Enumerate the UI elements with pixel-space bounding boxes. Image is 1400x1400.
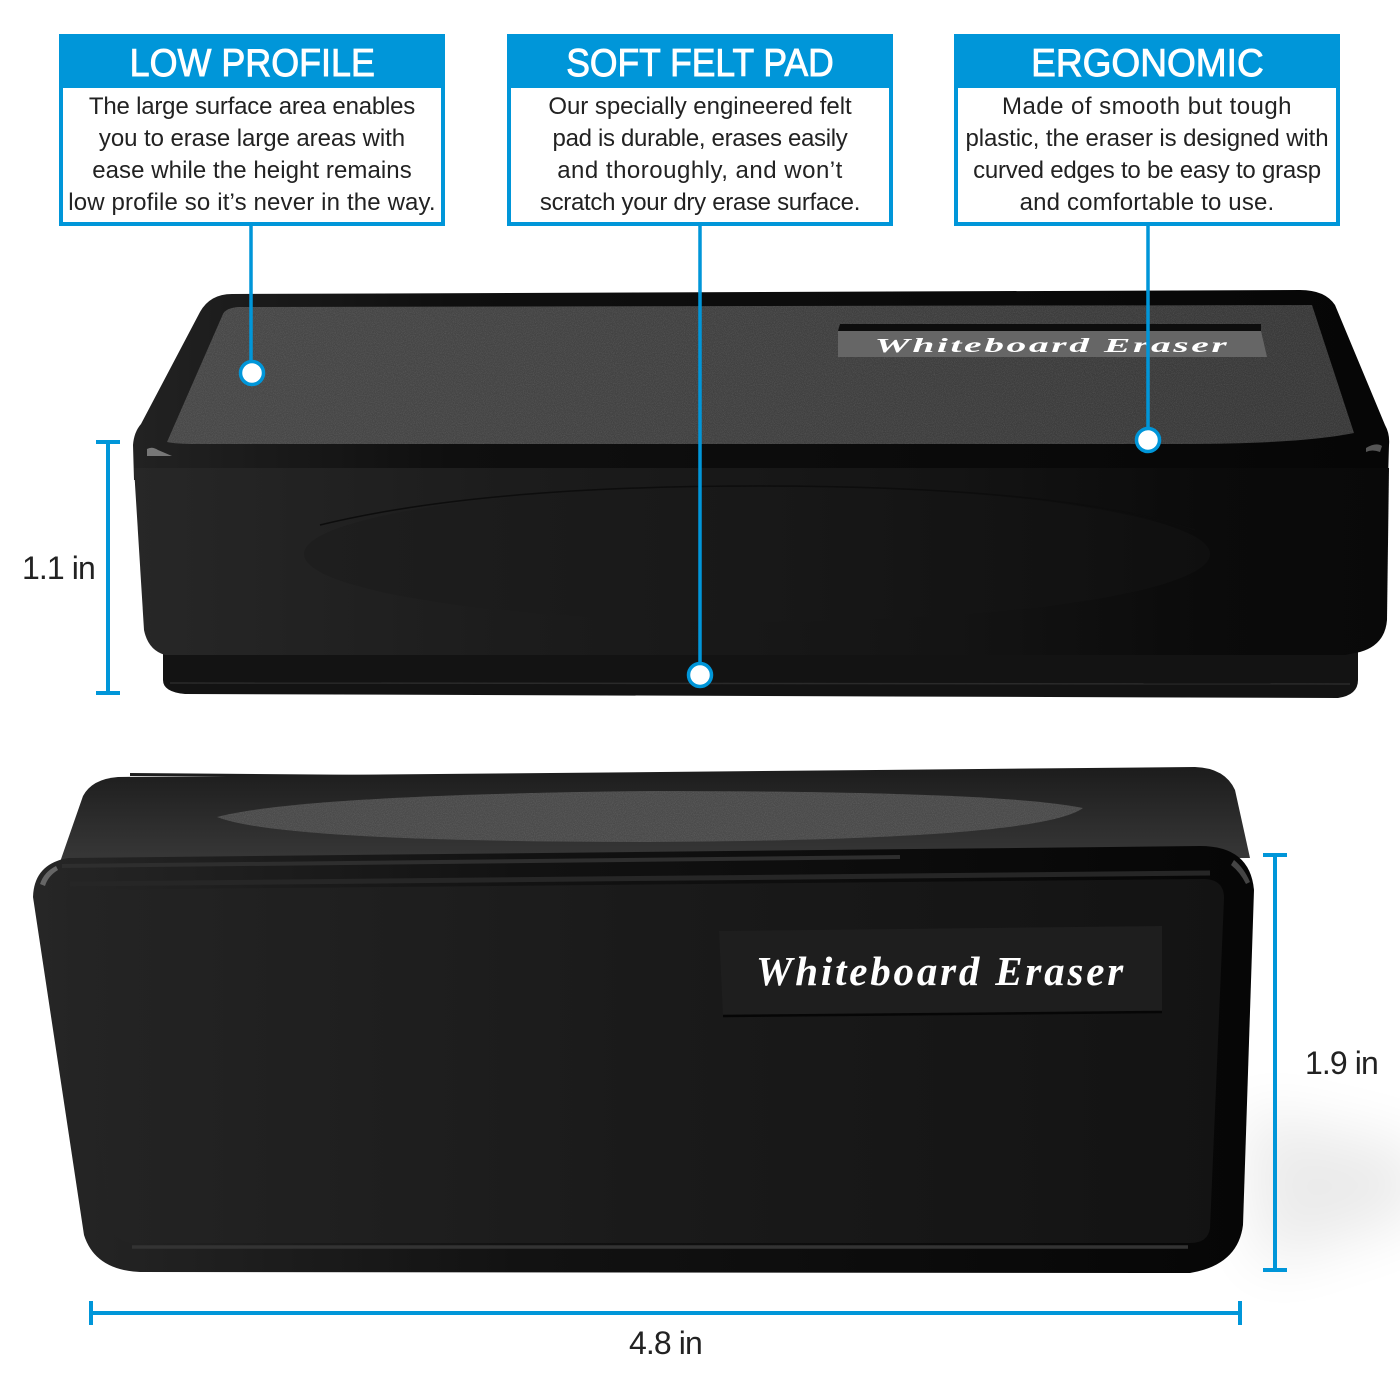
body text: and thoroughly, and won’t <box>557 157 843 184</box>
body text: pad is durable, erases easily <box>553 125 847 152</box>
card: low profile <box>59 34 445 226</box>
dimension: 1.1 in: 1.1 in <box>22 550 95 586</box>
eraser top surface <box>167 305 1354 444</box>
dimension lines <box>91 442 1287 1325</box>
felt seam <box>170 683 1350 684</box>
body text: The large surface area enables <box>89 93 415 120</box>
eraser front face <box>66 879 1224 1243</box>
leader lines with dots <box>240 226 1160 686</box>
heading <box>954 34 1340 88</box>
rim highlight <box>147 448 172 456</box>
leader: ergonomic <box>1136 226 1160 452</box>
oval upper outline <box>320 486 1195 530</box>
label plate <box>838 331 1267 357</box>
depth bracket <box>1263 855 1287 1270</box>
heading: LOW PROFILE <box>129 42 375 85</box>
label text: Whiteboard Eraser <box>756 948 1126 994</box>
body text: you to erase large areas with <box>99 125 405 152</box>
eraser rim silhouette <box>133 290 1389 480</box>
heading <box>507 34 893 88</box>
body text: ease while the height remains <box>92 157 412 184</box>
label slit <box>838 324 1261 331</box>
label plate <box>719 926 1162 1016</box>
heading: ERGONOMIC <box>1031 42 1263 85</box>
rim corner highlight <box>1366 444 1382 452</box>
label text: Whiteboard Eraser <box>875 334 1229 356</box>
eraser body side <box>134 468 1389 655</box>
felt pad <box>163 652 1358 698</box>
dimension: 4.8 in: 4.8 in <box>629 1325 702 1361</box>
floor shadow <box>1245 1110 1400 1268</box>
plate lower edge <box>723 1012 1162 1016</box>
eraser front frame <box>33 846 1254 1273</box>
leader: soft felt pad <box>688 226 712 686</box>
felt sliver <box>130 768 1160 776</box>
top oval <box>217 791 1083 842</box>
bottom eraser photo <box>33 767 1254 1273</box>
body text <box>68 93 436 216</box>
body text: curved edges to be easy to grasp <box>973 157 1321 184</box>
body text: Made of smooth but tough <box>1002 93 1292 120</box>
top eraser photo <box>133 290 1389 698</box>
card: soft felt pad <box>507 34 893 226</box>
body text: scratch your dry erase surface. <box>540 189 860 216</box>
body text: low profile so it’s never in the way. <box>68 189 436 216</box>
body text: plastic, the eraser is designed with <box>966 125 1328 152</box>
leader: low profile <box>240 226 264 384</box>
body text: and comfortable to use. <box>1020 189 1274 216</box>
heading <box>59 34 445 88</box>
frame corner highlight <box>40 866 58 886</box>
height bracket <box>96 442 120 693</box>
card: ergonomic <box>954 34 1340 226</box>
frame highlight <box>62 857 900 866</box>
body text <box>966 93 1328 216</box>
recessed oval <box>304 486 1210 622</box>
frame bottom highlight <box>132 1245 1188 1249</box>
body text <box>540 93 860 216</box>
heading: SOFT FELT PAD <box>566 42 834 85</box>
width bracket <box>91 1301 1240 1325</box>
frame right corner highlight <box>1231 860 1250 884</box>
dimension: 1.9 in: 1.9 in <box>1305 1045 1378 1081</box>
frame inner band <box>70 873 1210 884</box>
eraser top side <box>60 767 1250 862</box>
body text: Our specially engineered felt <box>548 93 852 120</box>
